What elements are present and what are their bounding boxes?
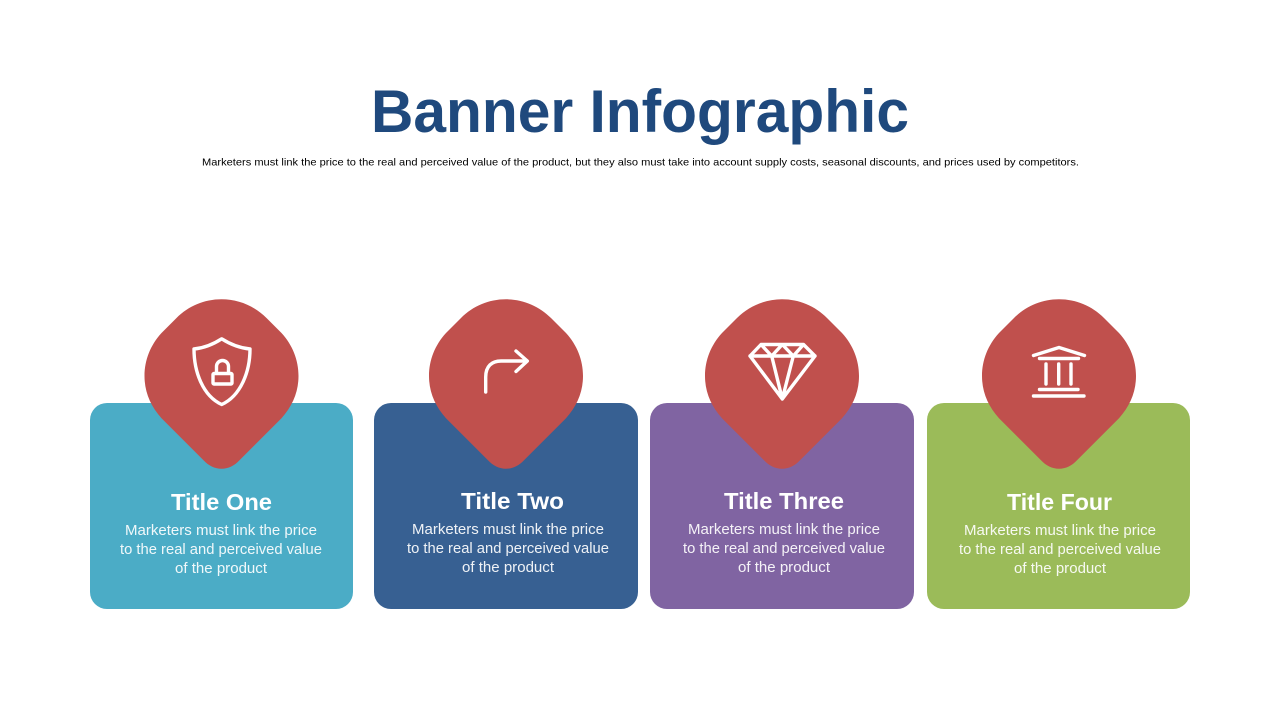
body text two: Marketers must link the price xyxy=(412,522,604,538)
panel: title four xyxy=(927,299,1190,609)
body text one: to the real and perceived value xyxy=(120,542,322,558)
body text two: to the real and perceived value xyxy=(407,541,609,557)
body text two: of the product xyxy=(462,560,554,576)
icon: bank building xyxy=(1034,348,1084,396)
card background two xyxy=(374,403,638,609)
pin badge three xyxy=(705,299,859,469)
body text four: of the product xyxy=(1014,561,1106,577)
body text one xyxy=(120,523,322,577)
card background four xyxy=(927,403,1190,609)
pin badge two xyxy=(429,299,583,469)
heading one: Title One xyxy=(171,489,272,515)
heading four: Title Four xyxy=(1007,489,1112,515)
body text three: Marketers must link the price xyxy=(688,522,880,538)
pin badge four xyxy=(982,299,1136,469)
body text one: of the product xyxy=(175,561,267,577)
icon: turn arrow xyxy=(486,351,527,392)
panel: title one xyxy=(90,299,353,609)
body text four xyxy=(959,523,1161,577)
pin badge one xyxy=(144,299,298,469)
body text three xyxy=(683,522,885,576)
title: Banner Infographic xyxy=(371,78,909,145)
body text four: to the real and perceived value xyxy=(959,542,1161,558)
subtitle: Marketers must link the price to the real and perceived value of the product, but they also must take into account supply costs, seasonal discounts, and prices used by competitors. xyxy=(202,156,1079,168)
card background three xyxy=(650,403,914,609)
panel: title two xyxy=(374,299,638,609)
body text four: Marketers must link the price xyxy=(964,523,1156,539)
icon: shield with lock xyxy=(194,339,250,404)
body text one: Marketers must link the price xyxy=(125,523,317,539)
heading two: Title Two xyxy=(461,488,564,514)
body text three: to the real and perceived value xyxy=(683,541,885,557)
body text three: of the product xyxy=(738,560,830,576)
card background one xyxy=(90,403,353,609)
icon: diamond xyxy=(750,344,815,399)
panel: title three xyxy=(650,299,914,609)
body text two xyxy=(407,522,609,576)
heading three: Title Three xyxy=(724,488,844,514)
